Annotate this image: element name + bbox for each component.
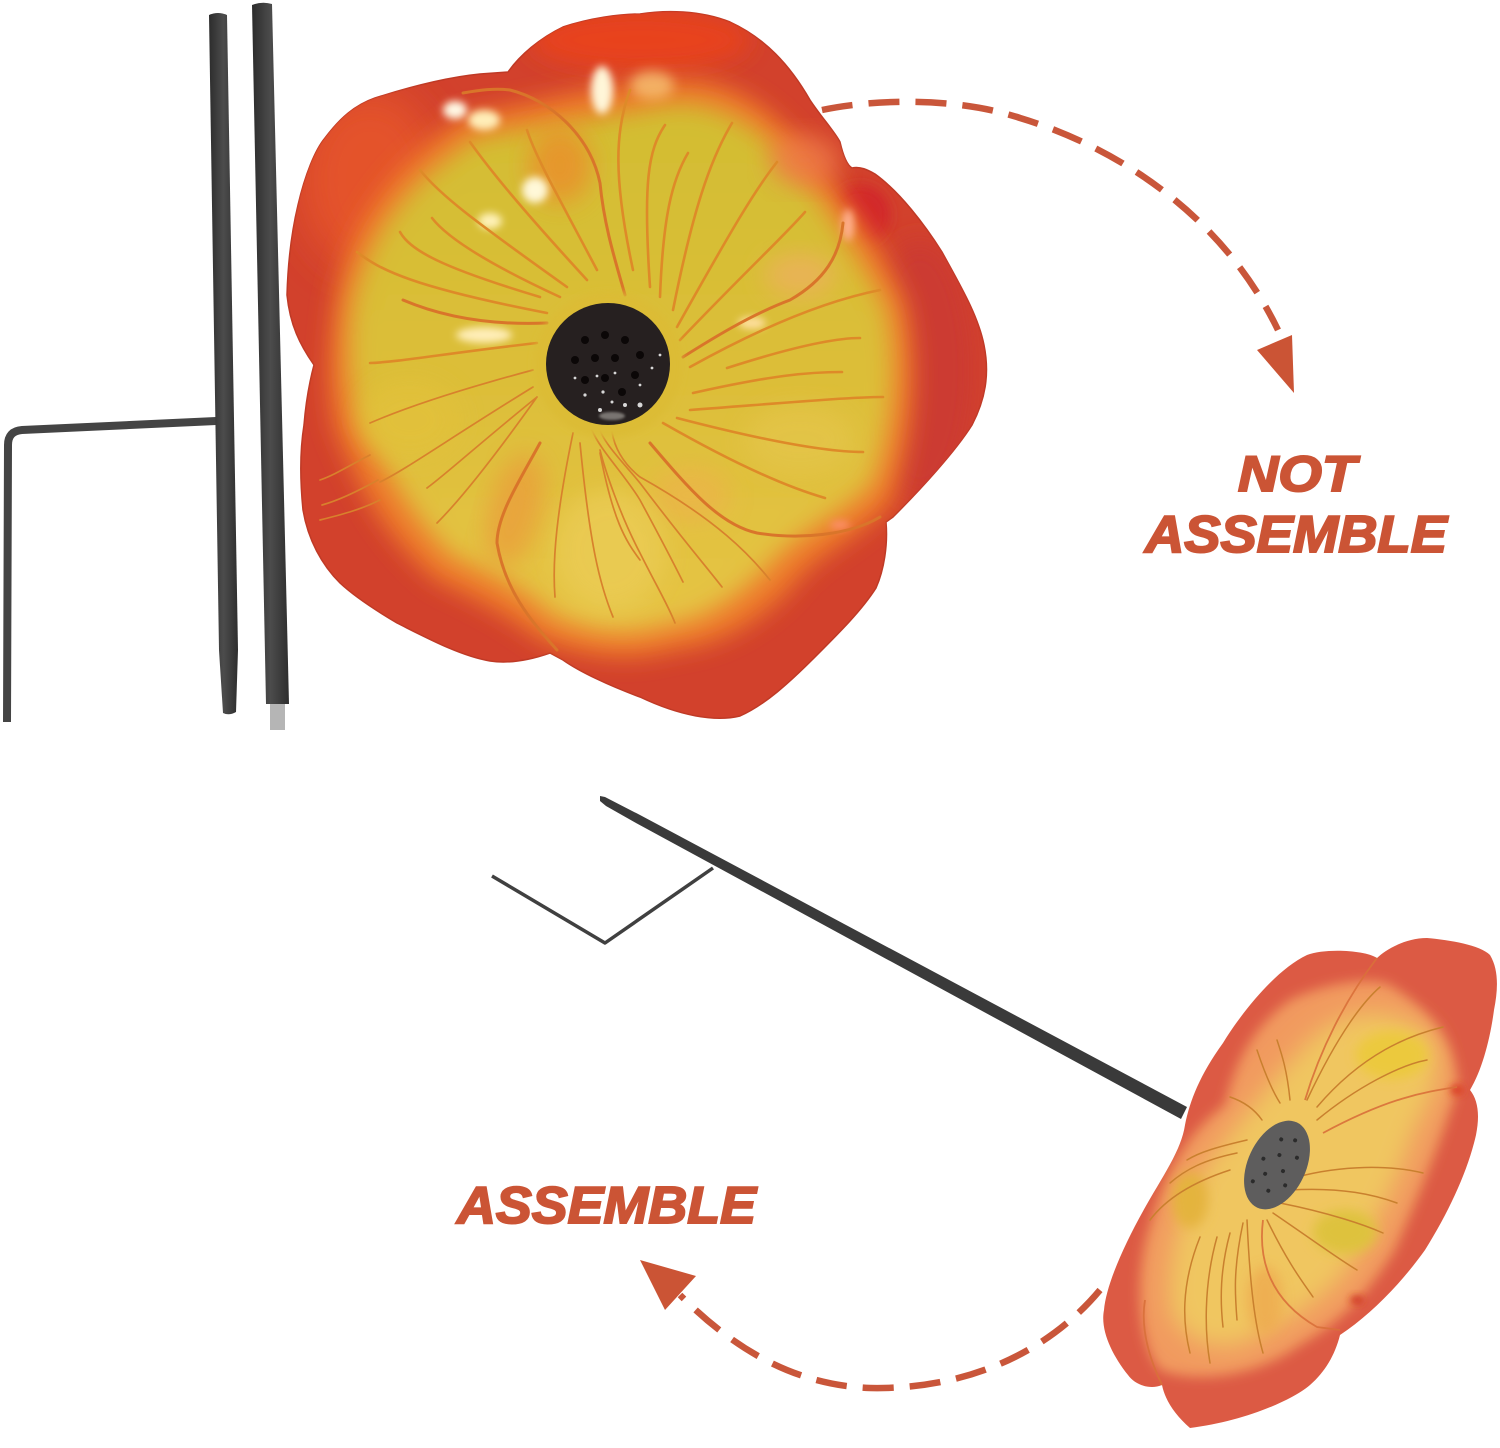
label: not assemble: ASSEMBLE [1143,506,1448,564]
flower centre [534,292,682,438]
glossy highlights [591,66,613,114]
dashed arrow: assemble [640,1260,1100,1388]
threaded stake [252,3,289,730]
small tilted poppy flower [1103,938,1497,1428]
yellow centre zone [349,104,893,632]
stake with bracket [7,13,238,722]
label: not assemble [1143,446,1448,564]
flower centre [1231,1110,1323,1220]
petal glow [329,80,913,657]
yellow highlights [1356,1031,1428,1079]
petal glow [1140,981,1458,1377]
flower veins [1150,987,1443,1363]
large poppy flower [287,10,987,718]
assembled stake [492,796,1187,1119]
red marks [1450,1085,1464,1095]
pale pink orange blush right [769,134,841,186]
flower veins [357,90,883,498]
petal folds [1144,958,1457,1385]
upper orange blush [528,127,592,203]
label: assemble: ASSEMBLE [455,1177,757,1235]
thin flower veins [320,370,770,623]
orange fold band lower [480,451,550,568]
rim colour patches [530,10,750,70]
paler yellow patches [555,490,665,610]
yellow centre zone [1169,1013,1438,1346]
dashed arrow: not assemble [822,102,1294,393]
petal folds [403,89,880,650]
label: not assemble: NOT [1238,446,1361,502]
